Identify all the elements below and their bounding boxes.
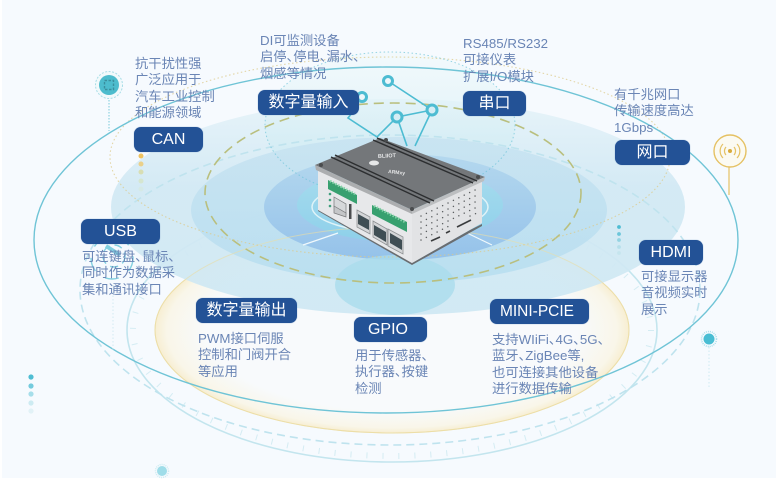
CAN description: 和能源领域 — [135, 105, 201, 120]
panel: HDMI — [638, 240, 707, 317]
ethernet badge: 网口 — [636, 144, 668, 161]
CAN description — [135, 56, 215, 120]
device status LEDs — [329, 193, 331, 207]
GPIO badge: GPIO — [368, 321, 408, 338]
HDMI description: 可接显示器 — [641, 269, 707, 284]
device USB ports — [334, 197, 352, 219]
icon: glowing node bottom — [156, 464, 168, 478]
device ethernet ports — [357, 210, 403, 254]
ethernet badge — [615, 140, 690, 165]
USB description: 同时作为数据采 — [82, 265, 175, 280]
MINI-PCIE description: 蓝牙、ZigBee等, — [492, 348, 584, 363]
GPIO description — [355, 348, 428, 396]
CAN description: 广泛应用于 — [135, 72, 201, 87]
MINI-PCIE badge — [490, 299, 589, 324]
HDMI badge: HDMI — [651, 244, 691, 261]
HDMI description: 展示 — [641, 302, 668, 317]
ethernet description: 1Gbps — [614, 120, 653, 135]
GPIO badge — [354, 317, 427, 342]
GPIO description: 检测 — [355, 381, 382, 396]
device logo: BLIIOT — [378, 153, 397, 160]
ethernet description — [614, 87, 694, 135]
CAN description: 抗干扰性强 — [135, 56, 201, 71]
digital input description: DI可监测设备 — [260, 33, 340, 48]
digital input description: 启停、停电、漏水、 — [260, 49, 360, 64]
device logo: ARMxy — [388, 169, 405, 177]
panel: digital input — [258, 33, 360, 116]
serial port description: 扩展I/O模块 — [463, 69, 534, 84]
digital input badge: 数字量输入 — [268, 94, 348, 111]
blue disc rings — [111, 52, 685, 315]
panel: MINI-PCIE — [490, 298, 604, 396]
MINI-PCIE description: 进行数据传输 — [492, 381, 572, 396]
MINI-PCIE description: 也可连接其他设备 — [492, 365, 598, 380]
digital input badge — [258, 90, 359, 115]
digital output description: 等应用 — [198, 364, 238, 379]
icon: CAN node — [96, 72, 122, 131]
USB badge: USB — [104, 223, 137, 240]
digital output badge: 数字量输出 — [206, 302, 286, 319]
serial port badge: 串口 — [478, 95, 510, 112]
outer tick ring — [127, 198, 657, 462]
dashed and dotted orbits — [34, 52, 738, 445]
serial port description: 可接仪表 — [463, 52, 516, 67]
HDMI description — [641, 269, 707, 317]
panel: CAN — [134, 56, 215, 152]
serial port description — [463, 36, 548, 84]
digital output description: 控制和门阀开合 — [198, 347, 291, 362]
device logo — [369, 153, 405, 177]
network lines — [348, 76, 437, 146]
panel: GPIO — [354, 316, 428, 396]
device green terminals — [328, 180, 407, 232]
CAN description: 汽车工业控制 — [135, 89, 215, 104]
icon trail: teal dots left — [28, 374, 34, 414]
digital input description: 烟感等情况 — [260, 66, 326, 81]
CAN badge: CAN — [152, 131, 185, 148]
ethernet description: 传输速度高达 — [614, 103, 694, 118]
icon: glowing node right — [702, 332, 716, 388]
CAN badge — [134, 127, 203, 152]
yellow lower disc — [155, 227, 629, 433]
HDMI badge — [639, 240, 703, 265]
panel: ethernet — [614, 87, 694, 166]
device slots — [431, 220, 471, 241]
icon: wifi signal node — [714, 135, 746, 195]
USB description — [82, 249, 175, 297]
panel: USB — [80, 218, 175, 297]
MINI-PCIE badge: MINI-PCIE — [500, 303, 574, 320]
icon: USB swirl — [91, 237, 133, 350]
device: gateway — [315, 138, 485, 265]
serial port description: RS485/RS232 — [463, 36, 548, 51]
panel: digital output — [196, 298, 298, 379]
USB description: 可连键盘、鼠标、 — [82, 249, 175, 264]
digital output description — [198, 331, 291, 379]
digital output description: PWM接口伺服 — [198, 331, 284, 346]
USB description: 集和通讯接口 — [82, 282, 162, 297]
ethernet description: 有千兆网口 — [614, 87, 680, 102]
GPIO description: 用于传感器、 — [355, 348, 428, 363]
MINI-PCIE description — [492, 332, 604, 396]
USB badge — [81, 219, 160, 244]
MINI-PCIE description: 支持WIiFi、4G、5G、 — [492, 332, 604, 347]
HDMI description: 音视频实时 — [641, 285, 707, 300]
digital input description — [260, 33, 360, 81]
device vent holes — [421, 189, 477, 240]
panel: serial port — [462, 36, 548, 116]
serial port badge — [463, 91, 526, 116]
digital output badge — [196, 298, 297, 323]
GPIO description: 执行器、按键 — [355, 364, 428, 379]
icon trail: teal dots right — [617, 225, 621, 255]
icon trail: yellow dots — [138, 154, 144, 192]
